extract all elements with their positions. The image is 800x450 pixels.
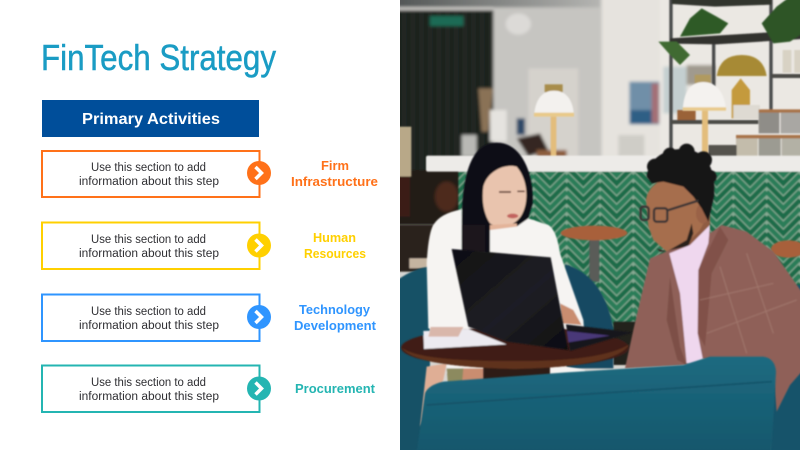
heading: Primary Activities: Primary Activities — [82, 111, 220, 128]
title: FinTech Strategy — [41, 37, 276, 78]
woman's hair back — [462, 143, 533, 253]
step 3: Technology Development — [42, 294, 377, 341]
front armchair — [415, 357, 776, 450]
icon: yellow chevron — [247, 234, 271, 258]
table lamp: left — [534, 84, 574, 157]
photo: two colleagues working at a laptop in a cafe — [400, 0, 800, 450]
step 4 text box — [42, 366, 260, 412]
step 2 label: Human — [313, 231, 356, 245]
laptop — [452, 249, 633, 351]
heading: Primary Activities — [42, 100, 259, 137]
step 3 text box: Use this section to add — [91, 306, 206, 318]
step 3 label: Technology — [299, 303, 370, 317]
step 1 text box — [42, 151, 260, 197]
man's blazer — [625, 225, 800, 412]
step 2 text box: information about this step — [79, 248, 219, 260]
step 3 label — [294, 303, 377, 333]
step 4 text box: information about this step — [79, 391, 219, 403]
step 1: Firm Infrastructure — [42, 151, 378, 197]
stools — [387, 225, 800, 365]
woman's white blazer — [427, 209, 585, 373]
step 4 label: Procurement — [295, 382, 376, 396]
table lamp: right — [683, 75, 726, 157]
man's curly hair — [647, 144, 717, 222]
step 4 text box: Use this section to add — [91, 377, 206, 389]
step 2 label: Resources — [304, 247, 366, 261]
shelving with plants and jars — [658, 0, 800, 159]
left content panel — [41, 37, 378, 413]
phone — [428, 327, 463, 337]
woman's neck and chest — [490, 223, 518, 255]
step 3 label: Development — [294, 319, 377, 333]
step 1 label — [291, 159, 378, 189]
step 2 text box: Use this section to add — [91, 234, 206, 246]
step 3 text box: information about this step — [79, 320, 219, 332]
step 1 text box: information about this step — [79, 176, 219, 188]
woman's face — [483, 166, 526, 227]
man's glasses — [641, 201, 698, 222]
man's face — [646, 176, 708, 252]
step 2: Human Resources — [42, 222, 366, 269]
step 3 text box — [42, 294, 260, 341]
icon: blue chevron — [247, 305, 271, 329]
step 1 label: Firm — [321, 159, 349, 173]
man's shirt — [669, 225, 710, 364]
man's neck — [673, 213, 710, 273]
bar counter with green herringbone tile — [387, 127, 800, 337]
papers — [423, 329, 507, 349]
armchair behind woman — [387, 264, 800, 450]
woman — [420, 143, 585, 427]
coffee table with papers and phone — [401, 327, 629, 382]
step 1 label: Infrastructure — [291, 175, 378, 189]
icon: teal chevron — [247, 376, 271, 400]
man's beard — [657, 223, 693, 252]
step 2 text box — [42, 222, 260, 269]
woman's arm and legs — [420, 363, 447, 427]
step 1 text box: Use this section to add — [91, 162, 206, 174]
icon: orange chevron — [247, 161, 271, 185]
step 4: Procurement — [42, 366, 376, 412]
man — [625, 144, 800, 412]
step 2 label — [304, 231, 366, 261]
cafe background — [380, 0, 800, 450]
